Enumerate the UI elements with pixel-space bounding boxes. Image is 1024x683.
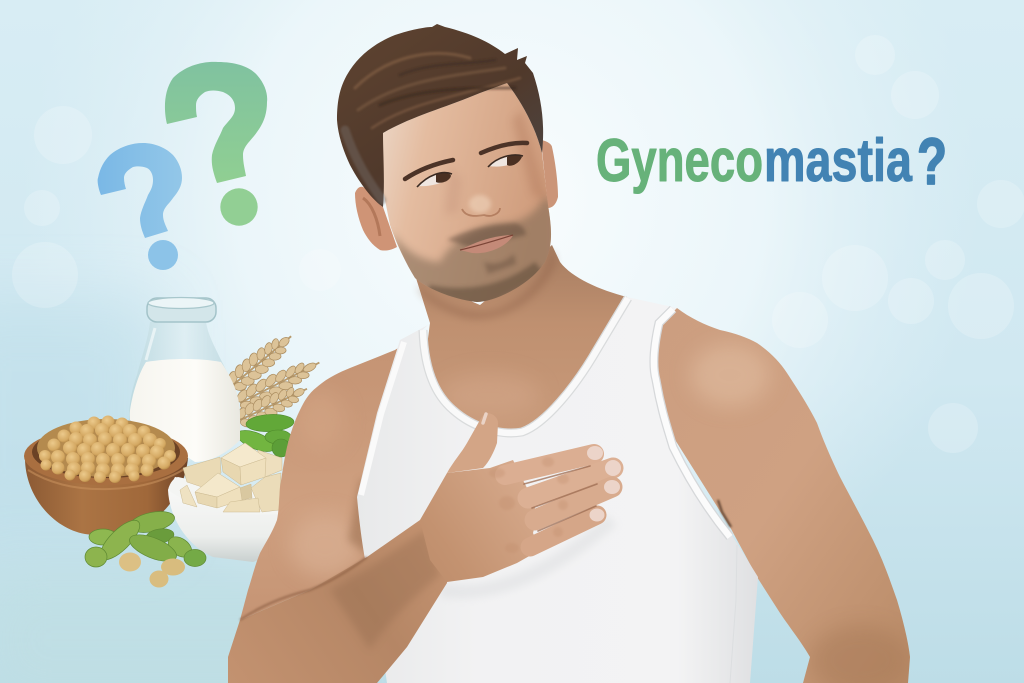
front edamame and soybeans	[85, 508, 206, 588]
tank top	[357, 297, 758, 683]
man	[228, 24, 910, 683]
wooden bowl	[24, 419, 188, 536]
eyes	[417, 155, 523, 187]
title: mastia	[764, 127, 912, 194]
wheat stalks	[223, 326, 325, 433]
title: Gyneco	[596, 127, 763, 194]
right ear	[541, 140, 558, 208]
eyebrows	[405, 143, 527, 179]
milk bottle	[129, 298, 240, 465]
hair	[337, 24, 543, 207]
tofu cubes	[180, 443, 282, 512]
icon: green question mark	[165, 62, 267, 226]
icon: blue question mark	[98, 143, 182, 270]
cheek shadow	[512, 114, 544, 196]
nose	[462, 195, 500, 216]
right arm	[650, 308, 910, 683]
neck and chest	[416, 245, 627, 440]
face	[383, 83, 556, 312]
title: ?	[917, 124, 947, 198]
hand on chest	[420, 413, 621, 582]
white bowl with tofu	[168, 443, 282, 562]
food group: soy products	[24, 298, 325, 588]
forearm	[228, 500, 450, 683]
stubble beard	[394, 196, 551, 302]
left ear	[355, 187, 397, 251]
title	[596, 124, 947, 198]
back edamame pods	[234, 413, 294, 457]
soybeans in bowl	[39, 416, 176, 483]
left upper arm	[240, 348, 398, 620]
lips	[460, 235, 513, 253]
